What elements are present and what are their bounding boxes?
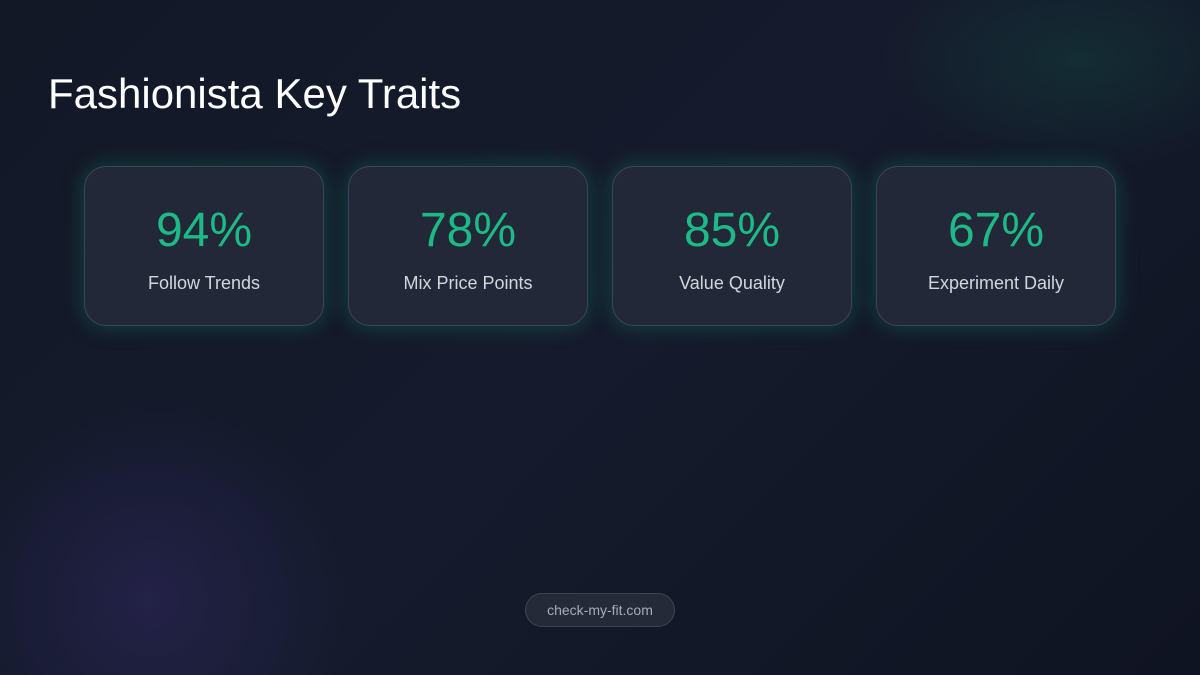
card: mix price points: 78% bbox=[420, 204, 516, 257]
card: follow trends: Follow Trends bbox=[148, 273, 260, 293]
card: experiment daily: 67% bbox=[948, 204, 1044, 257]
card: value quality bbox=[612, 166, 852, 326]
card: experiment daily: Experiment Daily bbox=[928, 273, 1064, 293]
card: experiment daily bbox=[876, 166, 1116, 326]
footer url pill: check-my-fit.com bbox=[547, 602, 653, 618]
card: follow trends: 94% bbox=[156, 204, 252, 257]
card: follow trends bbox=[84, 166, 324, 326]
card: mix price points bbox=[348, 166, 588, 326]
title: Fashionista Key Traits bbox=[48, 70, 461, 117]
card: mix price points: Mix Price Points bbox=[403, 273, 533, 293]
footer url pill bbox=[525, 593, 675, 627]
card: value quality: Value Quality bbox=[679, 273, 785, 293]
card: value quality: 85% bbox=[684, 204, 780, 257]
